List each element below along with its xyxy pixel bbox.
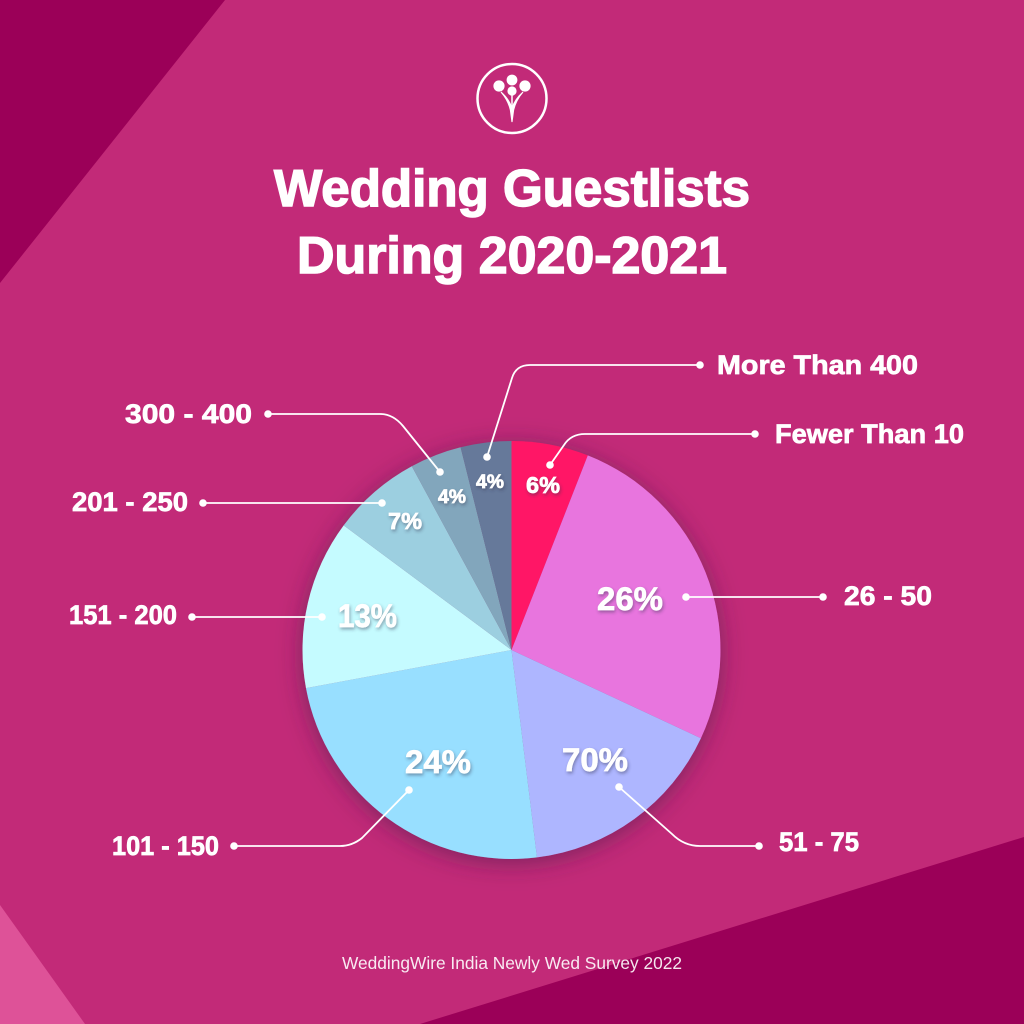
title: Wedding Guestlists [274,160,750,218]
category labels [69,350,964,861]
percentage labels: 26% [597,581,663,617]
slice: more than 400 [461,441,512,650]
category labels: 300 - 400 [125,399,252,429]
background shape: bottom right [420,837,1024,1024]
leader lines [192,365,823,846]
category labels: More Than 400 [717,350,918,380]
background shape: bottom left [0,905,85,1024]
title [274,160,750,285]
category labels: 51 - 75 [779,827,859,857]
percentage labels: 24% [405,744,471,780]
slice: 151 - 200 [302,525,512,688]
slice: 101 - 150 [306,650,537,859]
percentage labels: 6% [526,472,560,498]
percentage labels: 13% [338,598,397,634]
slice: 51 - 75 [512,650,701,857]
icon: bouquet logo [478,64,546,133]
pie chart [302,441,720,859]
slice: 26 - 50 [512,455,720,738]
title: During 2020-2021 [297,227,727,285]
slice: fewer than 10 [512,441,588,650]
background shape: top left [0,0,225,283]
slice: 201 - 250 [344,466,512,650]
category labels: 201 - 250 [72,487,188,517]
percentage labels: 70% [562,742,628,778]
source note: WeddingWire India Newly Wed Survey 2022 [342,953,682,973]
slice: 300 - 400 [412,447,512,650]
percentage labels [338,472,663,780]
category labels: Fewer Than 10 [775,419,964,449]
percentage labels: 4% [438,487,466,508]
category labels: 26 - 50 [844,581,932,611]
percentage labels: 4% [476,472,504,493]
percentage labels: 7% [388,508,422,534]
category labels: 151 - 200 [69,600,177,630]
leader dots [188,361,827,850]
category labels: 101 - 150 [112,831,219,861]
